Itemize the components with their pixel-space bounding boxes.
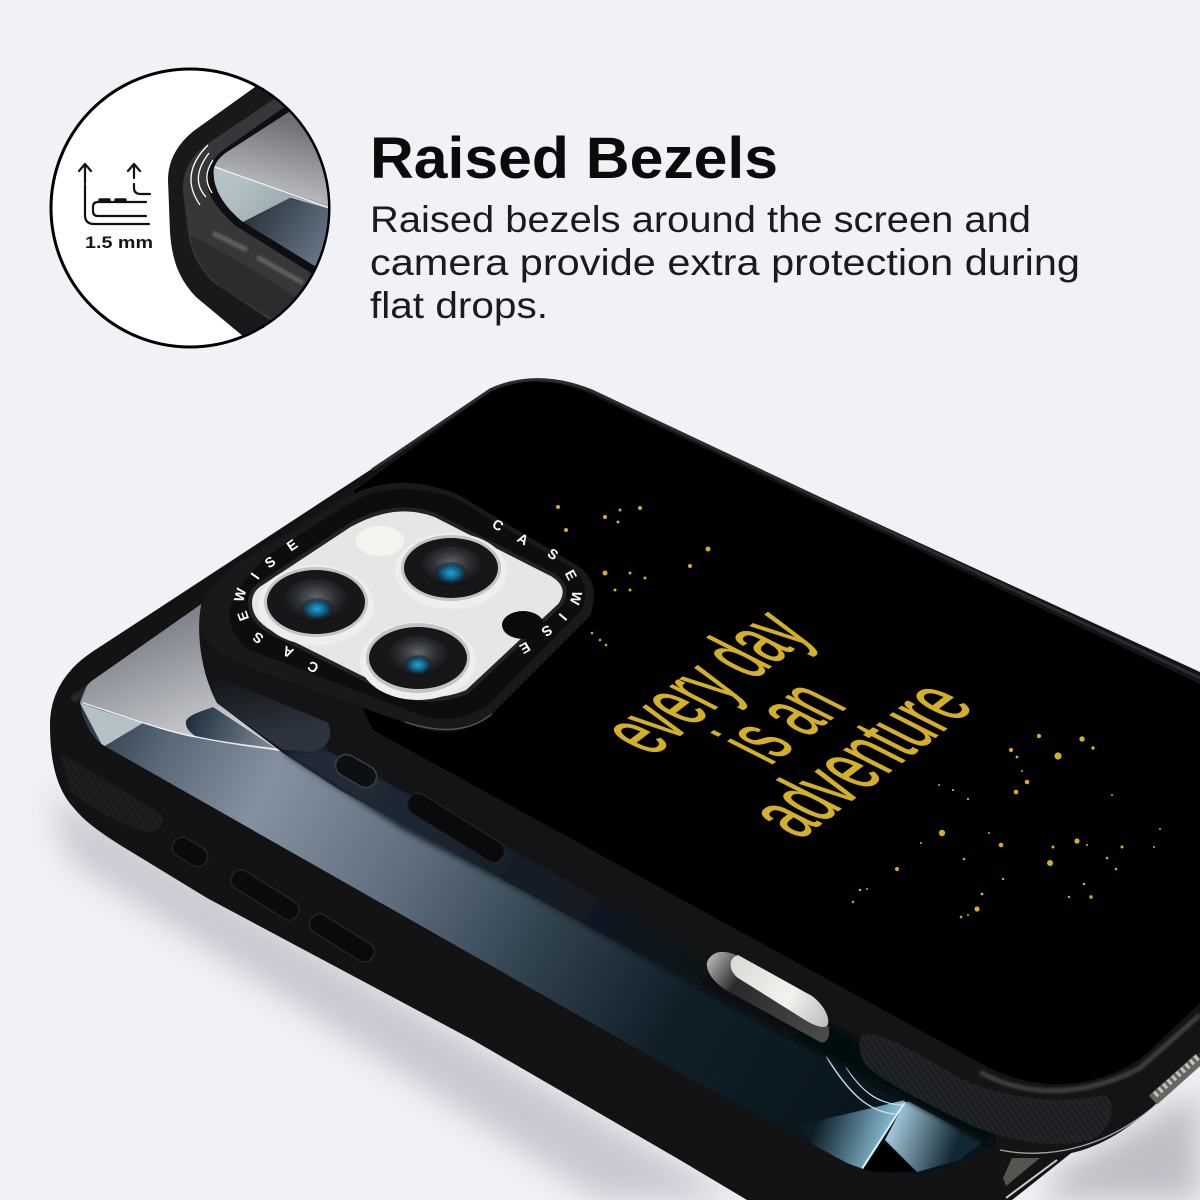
side of upper phone, blends to screen [283,748,993,1147]
ring lettering: CASEWISE: C [490,515,506,534]
lower phone side buttons [169,833,378,966]
gold artwork text: every day [575,596,832,766]
bumper band along lower edge [327,705,990,1105]
ring lettering: CASEWISE: S [539,622,555,640]
gold splatter dots [556,505,1161,918]
screen reflection: dark notch [186,707,275,748]
lower phone: front view with bumper [50,385,1075,1200]
flash [356,526,404,556]
screen reflection: grey glass [80,604,281,752]
charging port surround [707,952,829,1043]
bumper highlight [980,1015,1200,1091]
ring lettering: CASEWISE: S [545,545,561,563]
ring lettering: CASEWISE: W [230,586,250,603]
mute switch [331,750,381,792]
body text: camera provide extra protection during [370,242,1080,283]
ring lettering: CASEWISE: A [515,529,531,548]
ring lettering: CASEWISE: E [284,536,300,554]
inset screen glass [214,112,328,208]
screen reflection: pale wedge [80,703,143,747]
ring lettering: CASEWISE: A [280,643,296,661]
screen bottom-corner reflections [810,1100,905,1168]
upper phone: case back [199,380,1200,1155]
inset label: 1.5 mm: 1.5 mm [85,233,153,252]
lower phone bumper [50,385,1075,1200]
charging port [730,955,828,1027]
camera module [200,483,594,732]
gold artwork text: is an [693,667,867,775]
camera ring [229,489,585,719]
ring lettering: CASEWISE: C [305,658,321,676]
black case back [320,382,1200,1084]
inset icon: 1.5 mm bezel diagram [79,164,150,224]
upper phone bumper body [199,380,1200,1155]
body text: flat drops. [370,285,548,326]
ring lettering: CASEWISE: E [517,639,533,657]
lens: top [395,533,507,609]
speaker grille [1153,1055,1200,1100]
body text: Raised bezels around the screen and [370,199,1031,240]
heading: Raised Bezels: Raised Bezels [370,126,778,191]
side key [404,790,508,866]
mic hole [502,611,544,639]
carbon grip: lower phone corner [60,753,163,832]
gold artwork text [575,596,995,850]
inset highlight ridge [213,233,303,283]
camera-side grip tab [205,672,330,752]
ring lettering: CASEWISE: I [556,610,570,624]
inset circle: raised bezel close-up [51,69,340,347]
ring lettering: CASEWISE: S [262,553,278,571]
lower phone screen [80,604,992,1174]
ring lettering: CASEWISE: I [247,570,263,582]
drop shadow under phones [50,790,1200,1200]
carbon grip: bottom corner [859,1034,1112,1144]
lens: bottom [360,622,476,700]
inset white arcs [191,145,213,205]
ring lettering: CASEWISE: E [562,567,580,583]
camera ring bevel [200,483,594,732]
ring lettering: CASEWISE [230,515,586,676]
body text [370,199,1080,326]
bumper ridge highlight [72,605,210,700]
camera window [250,509,565,700]
gold artwork text: adventure [724,668,995,850]
lens: left [258,565,374,645]
ring lettering: CASEWISE: E [234,609,252,623]
ring lettering: CASEWISE: S [250,629,266,647]
inset phone corner [168,86,328,336]
port on lower phone [1003,1158,1040,1186]
ring lettering: CASEWISE: W [566,590,586,607]
